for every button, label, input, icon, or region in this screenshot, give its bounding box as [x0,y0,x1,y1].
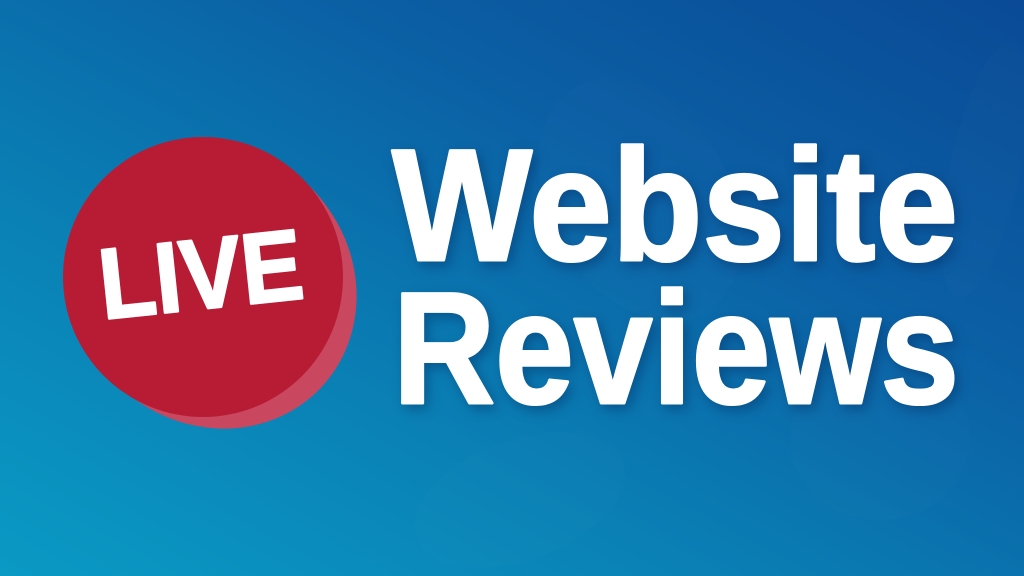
live badge [63,137,357,429]
badge label LIVE: LIVE [94,208,308,341]
badge main circle [63,137,343,417]
badge lighter edge [10,82,416,488]
title line: Website: Website [392,116,958,294]
title line: Reviews: Reviews [393,259,959,437]
